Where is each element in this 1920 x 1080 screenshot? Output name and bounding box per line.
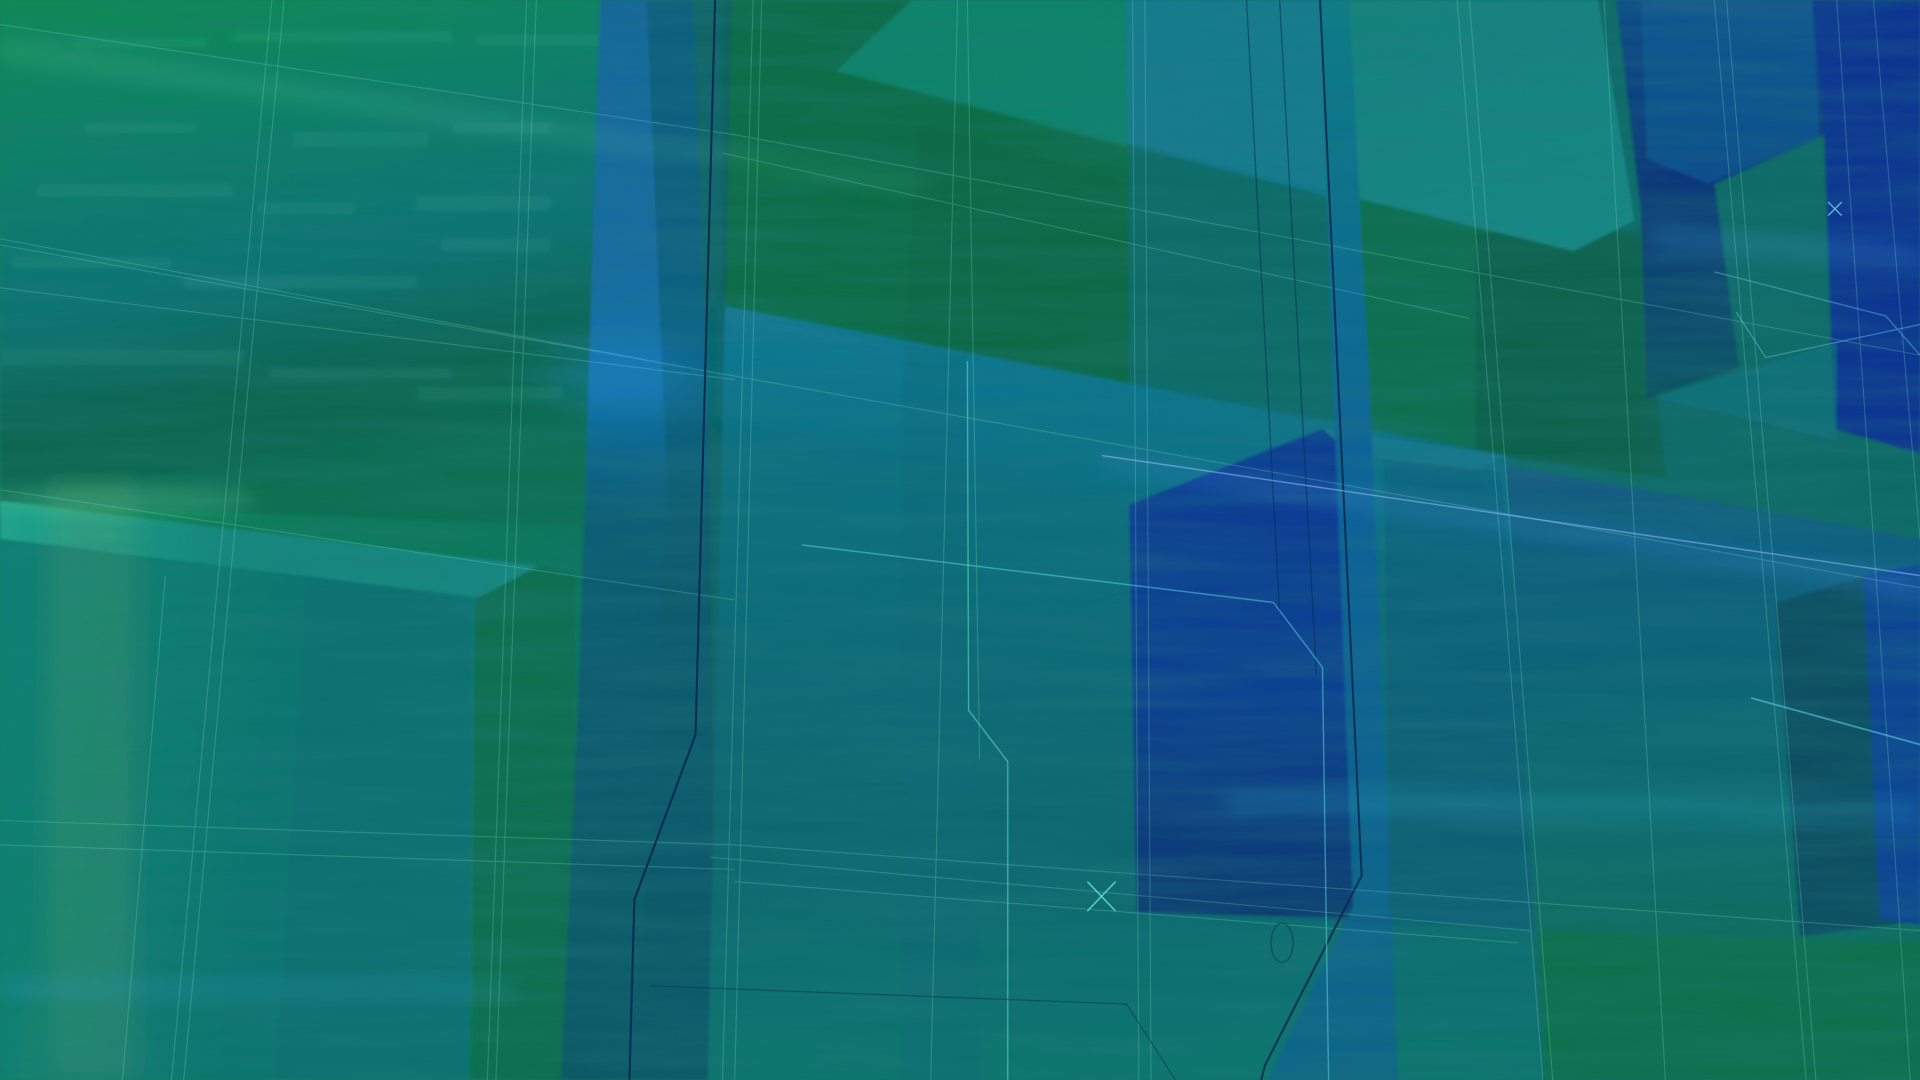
icon: cross marker [1087, 882, 1116, 911]
bright streak line [1102, 456, 1920, 576]
panel: teal column between top box and blue box [1129, 147, 1353, 429]
panel: green block right of centre [1353, 171, 1641, 478]
panel: lower right dark box [1776, 566, 1920, 937]
panel: lower right blue edge [1864, 563, 1920, 924]
light streak: right upper [1653, 227, 1920, 267]
panel: far right deep blue column [1812, 0, 1920, 453]
vertical pale glow on the box [49, 478, 135, 1080]
circuit trace: bright teal [967, 361, 1008, 1080]
light streak: lower horizontal glow [1224, 789, 1920, 823]
circuit trace: dark left [629, 0, 715, 1080]
side face of lower left box [276, 576, 471, 1080]
panel: blue column in centre [1267, 0, 1398, 1080]
right bright line [1751, 698, 1920, 744]
icon: ring [1271, 923, 1293, 962]
panel: dark teal right column [1653, 343, 1837, 441]
panel: lower right green block [1540, 931, 1920, 1080]
circuit trace: secondary dark centre [1247, 0, 1316, 673]
centre box column [900, 343, 980, 1080]
panel: dark green band at top centre [722, 0, 1133, 392]
blurred data text texture [0, 31, 637, 400]
panel: blue vertical band [561, 0, 715, 1080]
green strip right of lower left box [471, 566, 576, 1080]
glow: blue centre-left [539, 347, 710, 400]
dark vertical band [637, 0, 771, 1080]
panel: dark shadow column at centre [904, 122, 1133, 392]
panel: lower left translucent box [0, 502, 539, 1080]
panel: far right mid section [1506, 465, 1920, 1080]
light streak: long blue band [1102, 456, 1920, 595]
right circuit trace [1714, 272, 1920, 358]
circuit trace: horizontal teal [802, 545, 1329, 1080]
lower trace [649, 986, 1176, 1080]
panel: top translucent box [836, 0, 1635, 251]
light streak: bottom left [0, 980, 514, 997]
glow: lid green [0, 487, 257, 512]
upper right box face [1641, 0, 1820, 184]
light streak: upper left to centre [0, 37, 931, 193]
panel: dark blue box base [1136, 459, 1540, 931]
centre box top blue glow [722, 306, 1531, 576]
lid of blue box [1322, 429, 1506, 471]
top box front face [836, 0, 1127, 147]
panel: centre translucent box [708, 306, 1543, 1080]
box lid highlight [0, 501, 539, 598]
icon: small right cross marker [1828, 202, 1842, 216]
panel: upper left data wall [0, 0, 612, 527]
top box blue segment [1127, 0, 1349, 202]
circuit trace: dark centre [1261, 0, 1362, 1080]
panel: deep blue box [1129, 429, 1371, 918]
panel: right upper dark box [1616, 0, 1824, 398]
panel: dark green shadow block [1476, 233, 1665, 478]
